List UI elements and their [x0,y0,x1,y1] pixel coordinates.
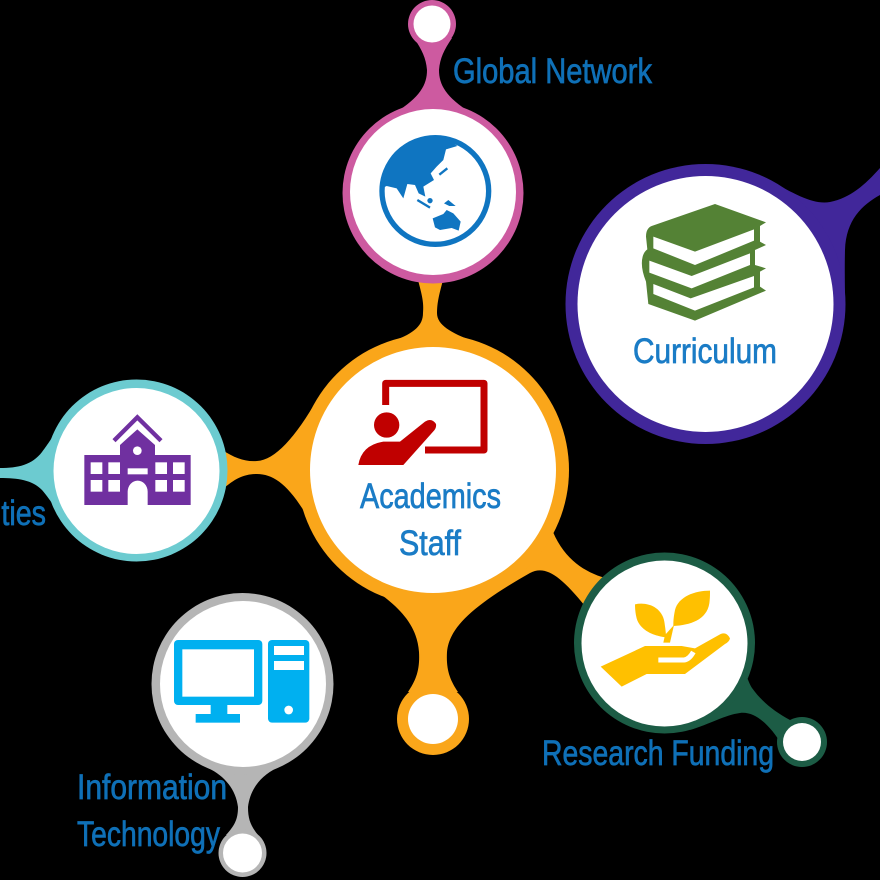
label: Information Technology [77,768,227,854]
node: Research Funding [542,552,827,773]
label: Information Technology: Information [77,768,227,807]
node: Global Network [342,0,652,284]
icon: stack of books [642,204,766,321]
ring [46,380,228,562]
small node disc [223,834,262,872]
hub ring [297,334,569,606]
icon: globe [382,137,489,244]
small node ring [218,829,266,877]
ring [152,593,334,775]
white disc [160,601,326,767]
small node disc [414,6,450,42]
connector: hub to bottom node and Research Funding [375,532,605,692]
connector: Curriculum stem [770,168,880,304]
node: Facilities [0,380,227,562]
connector: Facilities stem [0,425,60,515]
connector: hub to Facilities [222,398,320,540]
small node ring [777,717,827,767]
label: Information Technology: Technology [77,815,220,854]
node: Information Technology [77,593,334,877]
node: Curriculum [566,164,880,444]
icon: teacher at board [358,383,484,465]
white disc [54,388,220,554]
icon: desktop computer [174,640,309,723]
white disc [582,560,748,726]
connector: Research Funding stem [690,672,790,745]
icon: school building [84,417,191,505]
node: Academics Staff hub with connectors [222,280,605,755]
label: Academics Staff: Academics [360,477,501,516]
label: Research Funding: Research Funding [542,734,774,773]
ring [566,164,846,444]
ring [574,552,755,734]
bottom node white disc [408,694,458,744]
small node ring [408,0,456,48]
connector: Information Technology stem [208,768,277,835]
white disc [350,109,516,275]
label: Curriculum: Curriculum [633,332,777,371]
hub white disc [310,347,556,593]
white disc [578,176,834,432]
ring [342,102,524,284]
icon: hand holding seedling [601,591,730,687]
label: Academics Staff: Staff [399,524,461,563]
label: Global Network: Global Network [453,52,652,91]
connector: Global Network stem [395,38,471,113]
connector: hub to Global Network [393,280,473,341]
bottom node ring [397,683,469,755]
small node disc [783,723,821,761]
label: Academics Staff [360,477,501,563]
